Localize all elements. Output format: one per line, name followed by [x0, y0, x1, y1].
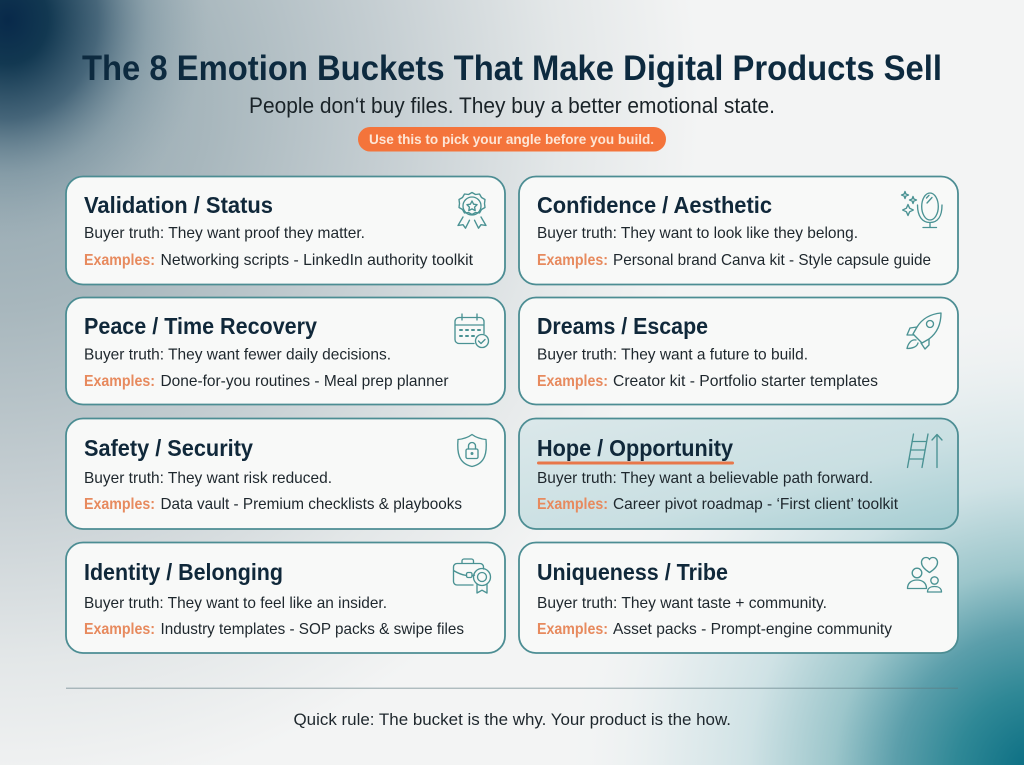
panel: Uniqueness / Tribe: Uniqueness / Tribe	[537, 559, 728, 585]
panel: Dreams / Escape: Examples:	[537, 373, 608, 390]
panel: Validation / Status: Networking scripts - LinkedIn authority toolkit	[160, 252, 474, 269]
panel: Identity / Belonging: Examples:	[84, 621, 155, 638]
panel: Safety / Security: Buyer truth: They want risk reduced.	[84, 470, 332, 487]
panel: Confidence / Aesthetic: Examples:	[537, 252, 608, 269]
panel: Uniqueness / Tribe: Asset packs - Prompt-engine community	[613, 621, 892, 638]
icon: ladder and up arrow	[908, 434, 942, 468]
panel: Dreams / Escape: Creator kit - Portfolio starter templates	[613, 373, 878, 390]
footer divider	[66, 688, 958, 689]
icon: mirror with sparkles	[902, 192, 942, 228]
icon: rocket	[907, 313, 941, 349]
icon: briefcase with badge	[454, 559, 490, 593]
icon: award rosette	[458, 192, 486, 228]
panel: Peace / Time Recovery: Peace / Time Recovery	[84, 313, 317, 339]
panel: Uniqueness / Tribe: Buyer truth: They want taste + community.	[537, 595, 827, 612]
panel: Validation / Status: Examples:	[84, 252, 155, 269]
panel: Confidence / Aesthetic: Confidence / Aesthetic	[537, 192, 772, 218]
panel: Identity / Belonging: Buyer truth: They want to feel like an insider.	[84, 595, 387, 612]
panel: Validation / Status	[66, 176, 505, 284]
accent underline	[537, 462, 734, 464]
icon: shield with lock	[458, 434, 486, 466]
panel: Confidence / Aesthetic: Personal brand Canva kit - Style capsule guide	[613, 252, 931, 269]
title: The 8 Emotion Buckets That Make Digital Products Sell	[82, 49, 942, 88]
panel: Identity / Belonging: Identity / Belonging	[84, 559, 283, 585]
panel: Peace / Time Recovery: Examples:	[84, 373, 155, 390]
panel: Dreams / Escape: Buyer truth: They want a future to build.	[537, 346, 808, 364]
panel: Peace / Time Recovery	[66, 298, 505, 404]
panel: Safety / Security: Safety / Security	[84, 435, 253, 461]
icon: people with heart	[908, 558, 942, 592]
panel: Hope / Opportunity (highlighted)	[519, 418, 958, 529]
panel: Safety / Security: Data vault - Premium checklists & playbooks	[160, 496, 462, 513]
panel: Safety / Security	[66, 418, 505, 529]
panel: Uniqueness / Tribe: Examples:	[537, 621, 608, 638]
panel: Peace / Time Recovery: Done-for-you routines - Meal prep planner	[160, 373, 449, 390]
panel: Hope / Opportunity (highlighted): Examples:	[537, 496, 608, 513]
panel: Validation / Status: Buyer truth: They want proof they matter.	[84, 225, 365, 242]
panel: Confidence / Aesthetic: Buyer truth: They want to look like they belong.	[537, 225, 858, 242]
callout pill	[358, 127, 666, 152]
panel: Confidence / Aesthetic	[519, 176, 958, 284]
quick rule text: Quick rule: The bucket is the why. Your product is the how.	[294, 710, 731, 729]
panel: Safety / Security: Examples:	[84, 496, 155, 513]
panel: Hope / Opportunity (highlighted): Career pivot roadmap - ‘First client’ toolkit	[613, 496, 899, 513]
panel: Dreams / Escape	[519, 298, 958, 404]
icon: calendar with check	[455, 314, 488, 348]
panel: Dreams / Escape: Dreams / Escape	[537, 313, 708, 339]
panel: Validation / Status: Validation / Status	[84, 192, 273, 218]
panel: Identity / Belonging: Industry templates - SOP packs & swipe files	[160, 621, 464, 638]
panel: Uniqueness / Tribe	[519, 542, 958, 653]
subtitle: People don‘t buy files. They buy a better emotional state.	[249, 93, 775, 118]
callout pill: Use this to pick your angle before you build.	[369, 131, 654, 147]
panel: Hope / Opportunity (highlighted): Hope / Opportunity	[537, 435, 733, 461]
panel: Identity / Belonging	[66, 542, 505, 653]
panel: Peace / Time Recovery: Buyer truth: They want fewer daily decisions.	[84, 346, 391, 364]
panel: Hope / Opportunity (highlighted): Buyer truth: They want a believable path forward.	[537, 470, 873, 487]
